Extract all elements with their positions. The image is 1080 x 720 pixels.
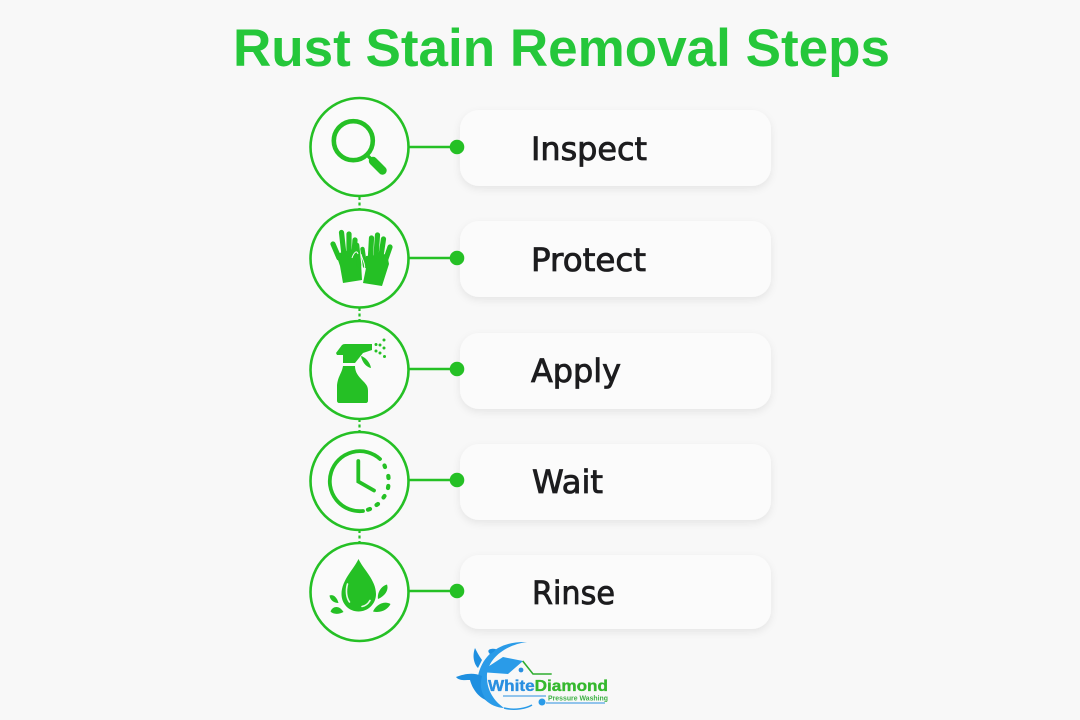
icon: clock (330, 451, 388, 511)
card: apply (460, 333, 771, 409)
circle: rinse (310, 543, 408, 641)
title: Rust Stain Removal Steps (233, 19, 890, 78)
step 3: apply (310, 321, 771, 419)
step 2: protect (310, 210, 771, 308)
label: apply: Apply (531, 352, 621, 390)
card: protect (460, 221, 771, 297)
label: rinse: Rinse (532, 574, 615, 612)
icon: water drop (330, 559, 390, 614)
logo tagline: Pressure Washing (548, 694, 608, 702)
circle: wait (310, 432, 408, 530)
label: wait: Wait (532, 463, 603, 501)
logo swoosh (478, 642, 527, 708)
label: inspect: Inspect (531, 130, 647, 168)
logo: White Diamond Pressure Washing (456, 642, 608, 709)
icon: magnifying glass (334, 121, 382, 170)
logo roof (480, 657, 523, 674)
step 1: inspect (310, 98, 771, 196)
step 4: wait (310, 432, 771, 530)
logo name: White Diamond (488, 678, 608, 695)
circle: apply (310, 321, 408, 419)
icon: gloves (333, 232, 390, 286)
label: protect: Protect (531, 241, 646, 279)
icon: spray bottle (336, 338, 386, 403)
card: wait (460, 444, 771, 520)
circle: protect (310, 210, 408, 308)
step 5: rinse (310, 543, 771, 641)
card: inspect (460, 110, 771, 186)
circle: inspect (310, 98, 408, 196)
card: rinse (460, 555, 771, 629)
